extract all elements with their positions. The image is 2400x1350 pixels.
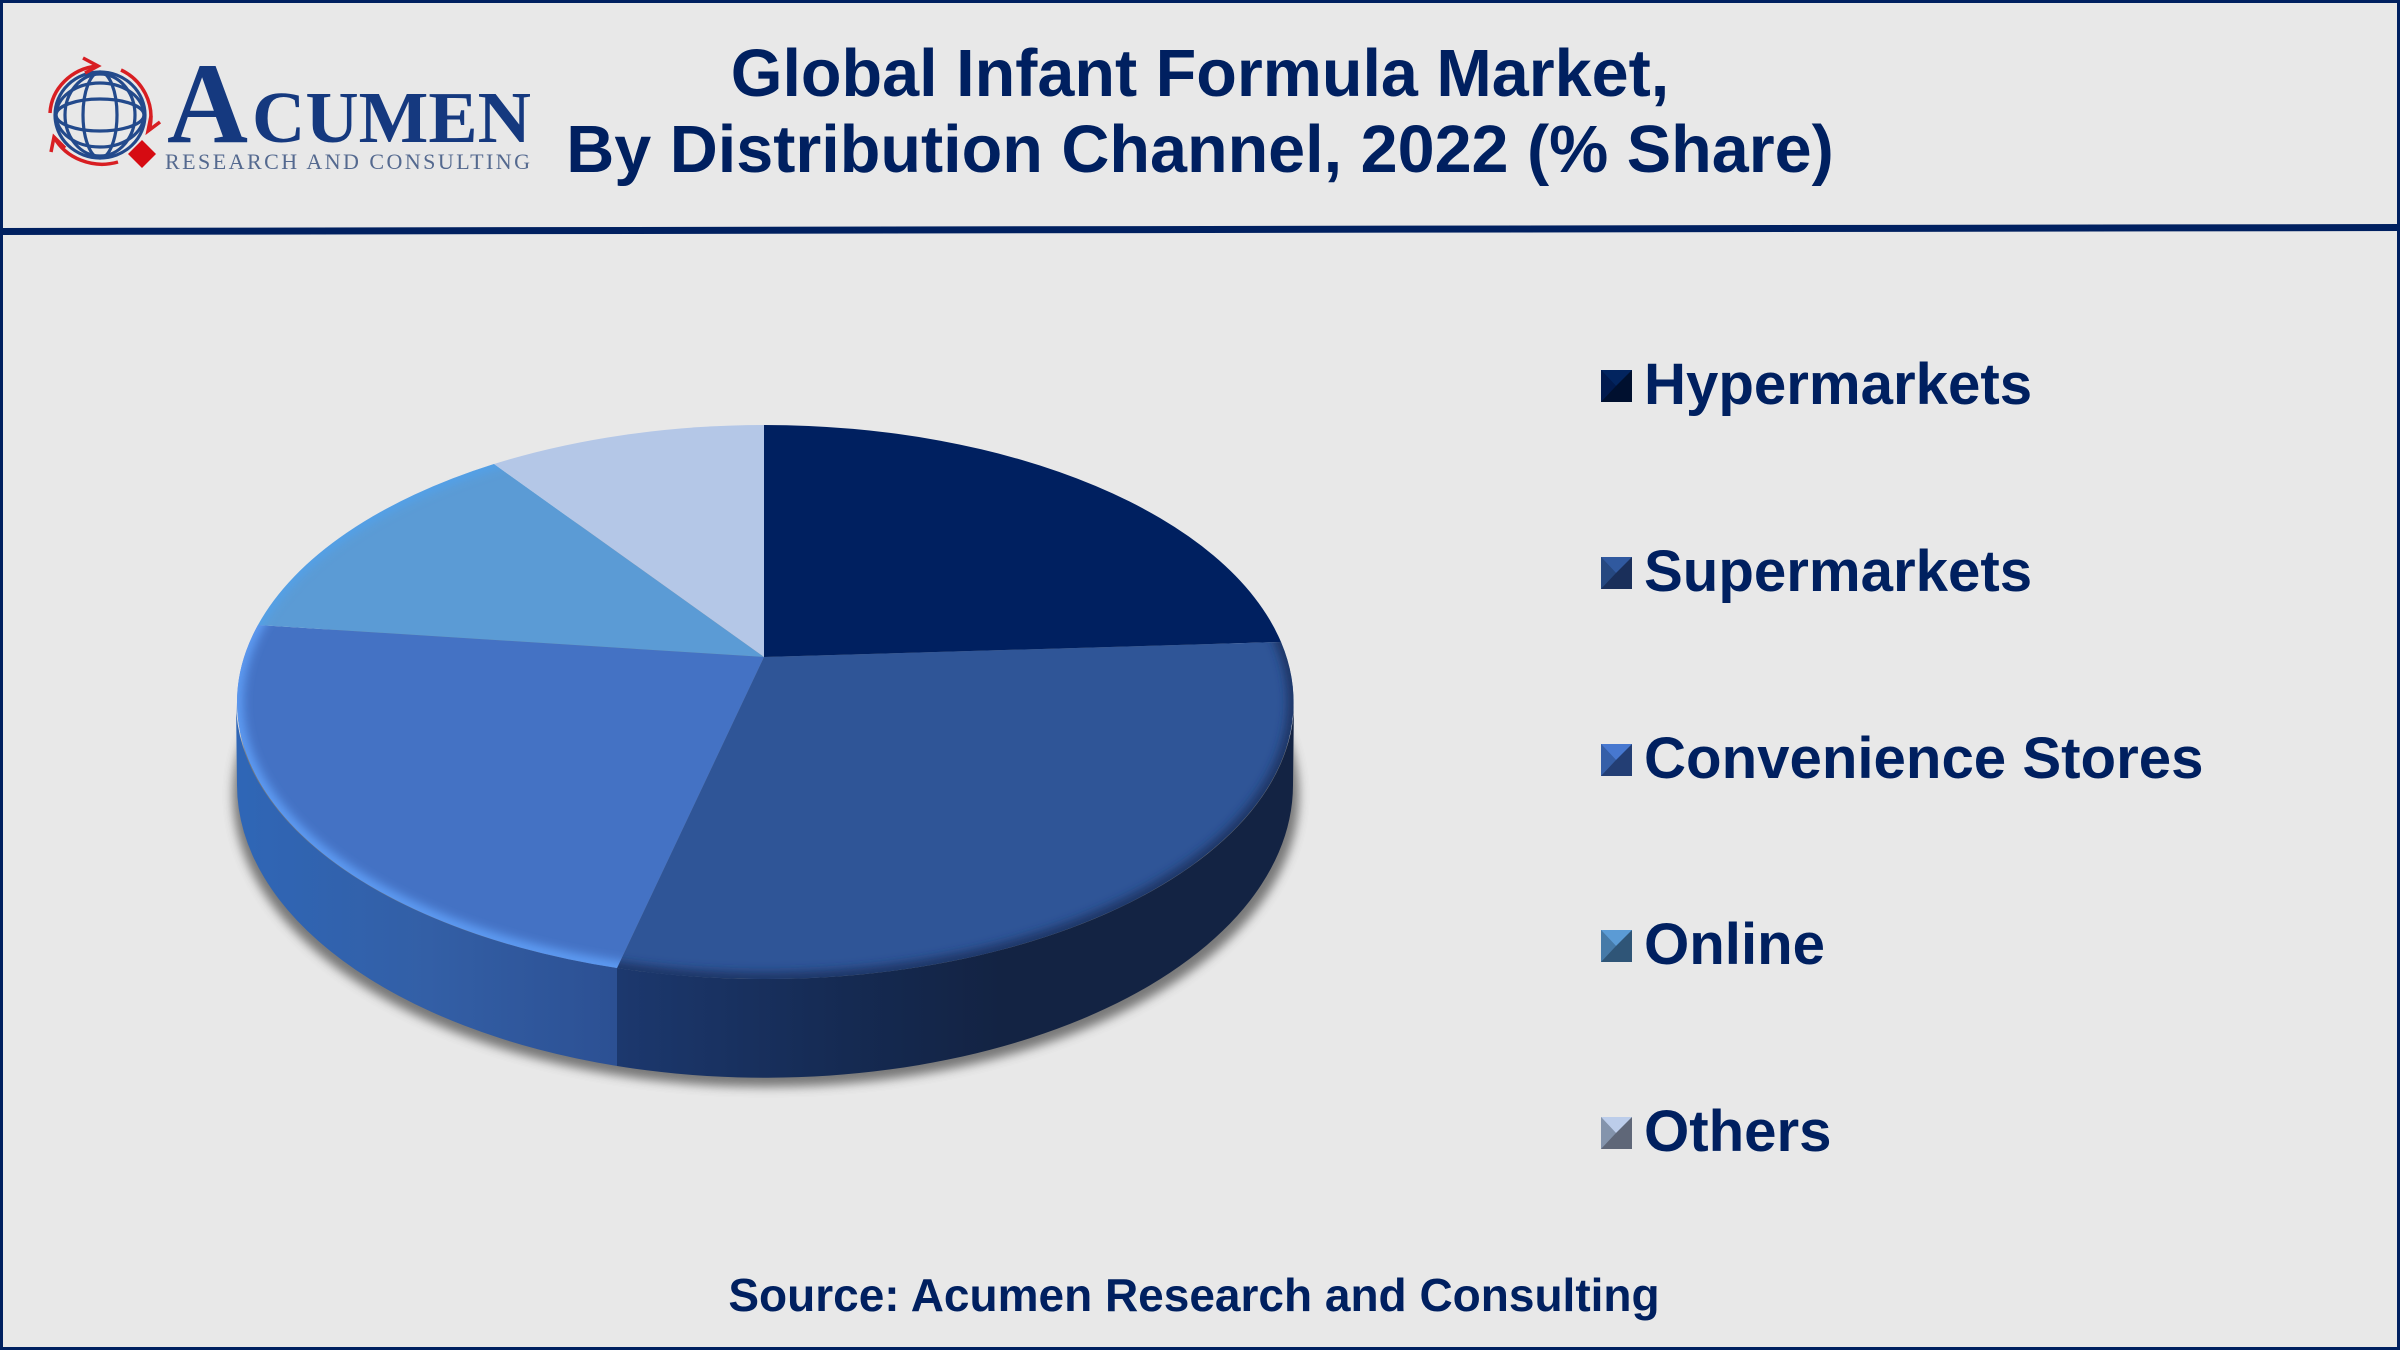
pie shadow	[233, 503, 1299, 1087]
slice: others	[494, 425, 764, 657]
legend item: Online: Online	[1644, 912, 1825, 977]
legend item: Hypermarkets: Hypermarkets	[1644, 352, 2032, 417]
logo: Acumen Research and Consulting	[50, 40, 531, 174]
logo tagline: RESEARCH AND CONSULTING	[165, 149, 530, 174]
logo wordmark: CUMEN	[252, 77, 531, 158]
slice: hypermarkets	[764, 425, 1281, 657]
3D pie chart	[233, 425, 1299, 1087]
slice: convenience stores	[237, 625, 764, 968]
logo wordmark: A	[167, 40, 248, 168]
title: Global Infant Formula Market,	[731, 37, 1669, 111]
legend item: Others: Others	[1644, 1099, 1832, 1164]
icon: red diamond	[128, 140, 156, 168]
legend	[1601, 352, 2203, 1164]
pie side: convenience stores	[236, 702, 617, 1066]
icon: globe	[55, 72, 145, 158]
legend item: Supermarkets: Supermarkets	[1644, 539, 2032, 604]
icon: red arrows	[50, 58, 160, 164]
slice: online	[258, 464, 764, 657]
title	[566, 37, 1834, 187]
legend item: Convenience Stores: Convenience Stores	[1644, 726, 2203, 791]
title: By Distribution Channel, 2022 (% Share)	[566, 113, 1834, 187]
source note: Source: Acumen Research and Consulting	[728, 1269, 1660, 1321]
logo wordmark	[167, 40, 531, 168]
header divider	[0, 224, 2400, 235]
pie side: supermarkets	[617, 702, 1294, 1078]
slice: supermarkets	[617, 642, 1294, 979]
